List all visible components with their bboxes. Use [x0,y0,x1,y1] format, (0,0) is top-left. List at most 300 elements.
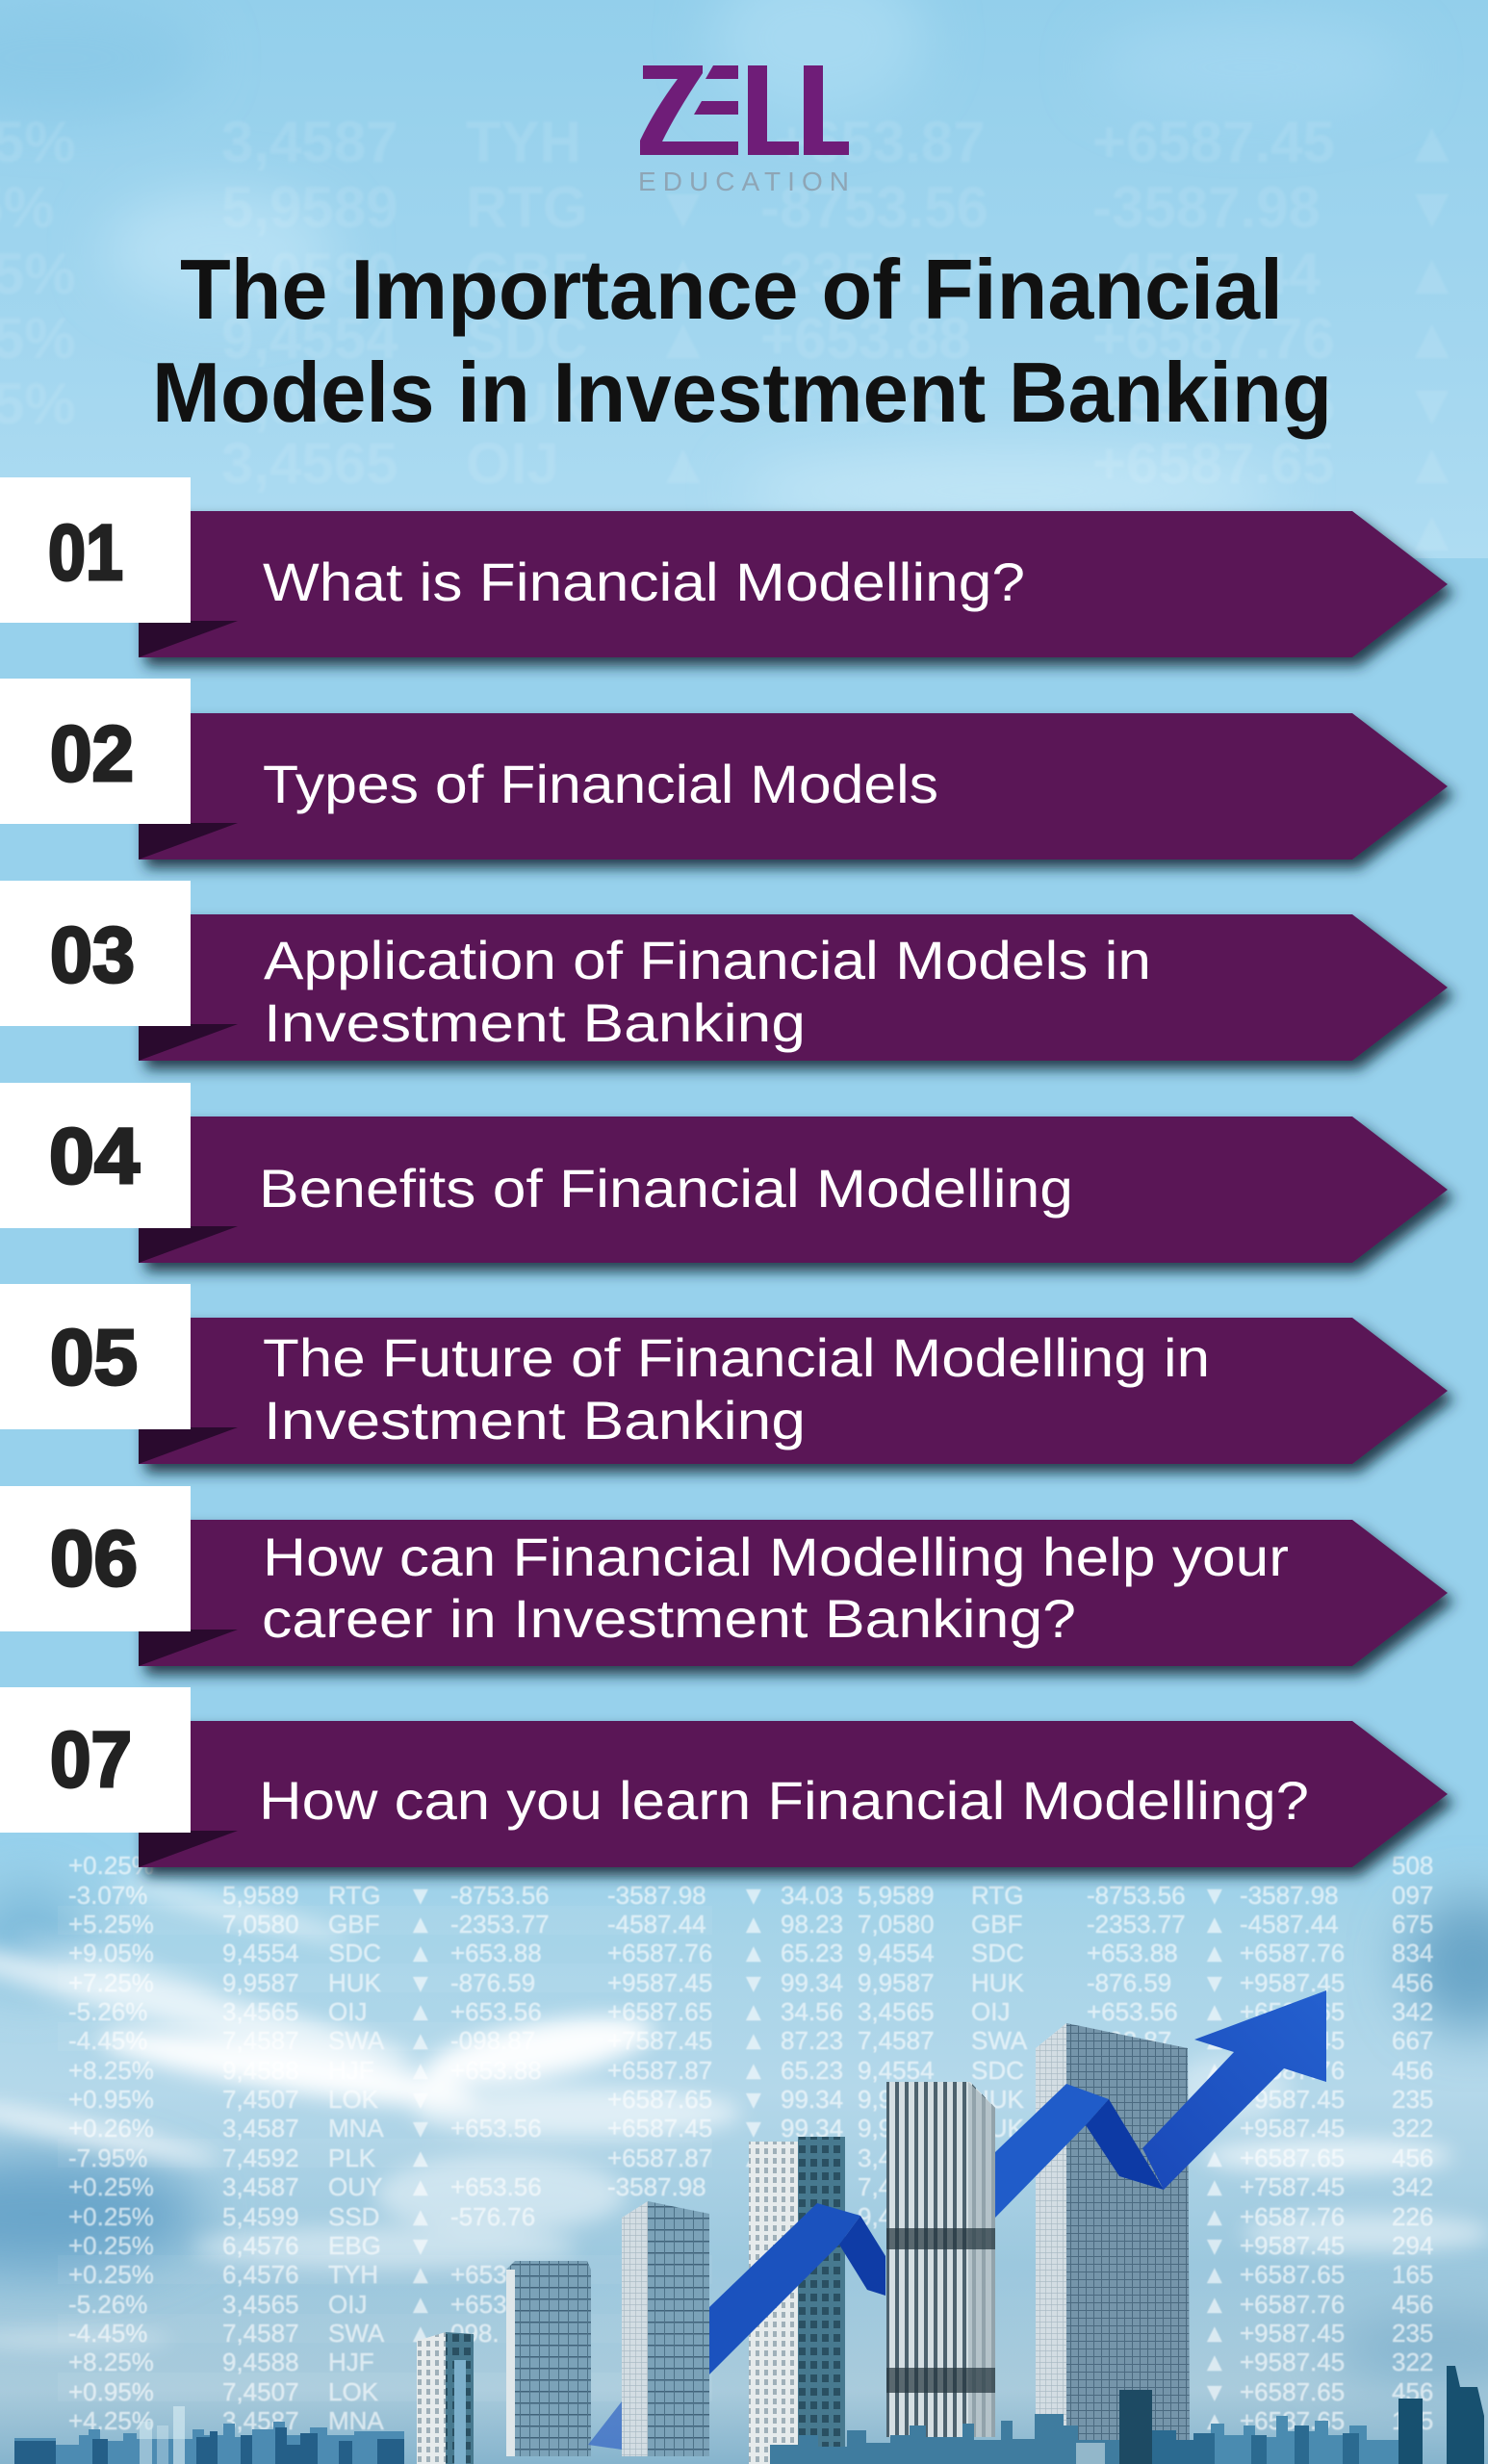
background: upper sky [0,0,1488,1858]
ticker data board: 7,0580 [222,1910,299,1938]
ticker data board: -7.95% [68,2143,147,2172]
ribbon fold [139,621,238,657]
ticker data board: ▲ [741,1938,766,1967]
ghost ticker behind title: GBF [466,242,588,306]
ribbon fold [139,1226,238,1263]
ghost ticker behind title: 5,9589 [221,175,398,240]
ticker data board: 456 [1392,2290,1433,2319]
ticker data board: HJF [328,2348,374,2376]
ticker data board: +6587.65 [1240,2406,1345,2435]
ticker data board: ▲ [1202,2056,1227,2085]
ticker data board: ▲ [408,2026,433,2055]
ticker data board: LOK [328,2377,379,2406]
item 05 [0,1284,1448,1464]
ticker data board: 294 [1392,2231,1433,2260]
ticker data board: +6587.45 [607,2114,712,2143]
ticker data board: ▲ [1202,2260,1227,2289]
ghost ticker behind title: +6587.76 [1092,306,1335,371]
ticker data board: 5,9589 [858,1881,935,1910]
ghost ticker behind title: +9587.45 [1092,372,1335,436]
ghost ticker behind title: ▲ [654,431,711,496]
ticker data board: ▼ [1202,2231,1227,2260]
ticker data board: -3587.98 [1240,1881,1339,1910]
ticker data board: +8.25% [68,2056,154,2085]
ticker data board: +6587.76 [1240,2290,1345,2319]
ticker data board: +0.26% [68,2114,154,2143]
ticker data board: +0.95% [68,2085,154,2114]
ticker data board: MNA [328,2406,384,2435]
ghost ticker behind title: ▼ [654,372,711,436]
label [264,930,1151,1053]
ticker data board: 7,4587 [222,2026,299,2055]
ghost ticker behind title: 9,4554 [221,306,398,371]
ticker data board: 99.34 [781,1968,843,1997]
ticker data board: +5.25% [68,1910,154,1938]
ticker data board: 9,9587 [222,1968,299,1997]
ticker data board: 097 [1392,1881,1433,1910]
ticker data board: +0.25% [68,2202,154,2231]
ticker data board: OIJ [328,2290,367,2319]
ticker data board: 7,4592 [222,2143,299,2172]
ticker data board: 098. [450,2319,500,2348]
title [152,242,1332,440]
ticker data board: ▼ [1202,2085,1227,2114]
ticker data board: 9,4554 [222,1938,299,1967]
building 5 [886,2082,995,2437]
ticker data board: 322 [1392,2114,1433,2143]
ticker data board: +653.56 [450,1997,542,2026]
ticker data board: +6587.76 [1240,2202,1345,2231]
ticker data board: 9,4554 [858,1938,935,1967]
ticker data board: ▼ [1202,1968,1227,1997]
label: What is Financial Modelling? [263,552,1025,612]
logo mark [640,65,849,155]
ghost ticker behind title: -876.59 [760,372,957,436]
ticker data board: EBG [328,2231,381,2260]
ticker data board: +0.25% [68,2231,154,2260]
ticker data board: ▲ [741,1910,766,1938]
ticker data board: +9587.45 [1240,2114,1345,2143]
ticker data board: +6587.87 [607,2056,712,2085]
ticker data board [68,1851,1433,2435]
ticker data board: 235 [1392,2085,1433,2114]
ticker data board: +9587.45 [607,1968,712,1997]
ticker data board: OIJ [328,1997,367,2026]
ticker data board: ▲ [1202,2202,1227,2231]
number: 07 [50,1716,132,1804]
ticker data board: ▼ [1202,2114,1227,2143]
ticker data board: ▲ [1202,2319,1227,2348]
ticker data board: +9587.45 [1240,1968,1345,1997]
ghost ticker behind title: ▲ [1403,431,1460,496]
ticker data board: 7,4587 [222,2319,299,2348]
item 02 [0,679,1448,860]
ticker data board: ▲ [408,2202,433,2231]
number box [0,1083,191,1228]
ticker data board: -4.45% [68,2026,147,2055]
ticker data board: 9,4588 [222,2348,299,2376]
ticker data board: +653.88 [450,1938,542,1967]
ghost ticker behind title: -4587.44 [1092,242,1321,306]
ticker data board: +6587.76 [1240,2056,1345,2085]
ticker data board: +0.25% [68,2172,154,2201]
ticker data board: 7,4507 [222,2377,299,2406]
ticker data board: +653.56 [1087,1997,1178,2026]
ticker data board: +653.88 [1087,1938,1178,1967]
ticker data board: +7587.45 [607,2026,712,2055]
ticker data board: 99.34 [781,2085,843,2114]
ticker data board: 675 [1392,1910,1433,1938]
label: Application of Financial Models in [264,930,1151,990]
ticker data board: 7,4587 [858,2026,935,2055]
number box [0,1687,191,1833]
building 6 [1036,2023,1190,2440]
ghost ticker behind title: ▲ [1403,242,1460,306]
number: 04 [49,1113,140,1200]
city buildings [417,1990,1326,2464]
ticker data board: ▼ [408,2085,433,2114]
ticker data board: -098.87 [450,2026,535,2055]
label: career in Investment Banking? [262,1588,1076,1649]
ticker data board: ▲ [408,2260,433,2289]
ticker data board: PLK [328,2143,376,2172]
ribbon fold [139,1630,238,1666]
ticker data board: 87.23 [781,2026,843,2055]
ticker data board: +9587.45 [1240,2348,1345,2376]
ticker data board: 226 [1392,2202,1433,2231]
ticker data board: -2353.77 [1087,1910,1186,1938]
ticker data board: SSD [328,2202,379,2231]
ticker data board: 3,4587 [222,2406,299,2435]
ticker data board: +6587.65 [1240,2377,1345,2406]
ghost ticker behind title: ▼ [654,175,711,240]
ticker data board: 7,4587 [858,2172,935,2201]
ticker data board: +9587.45 [1240,2231,1345,2260]
ticker data board: -876.59 [1087,1968,1171,1997]
number: 06 [50,1515,138,1603]
ticker data board: ▼ [408,2231,433,2260]
label: Investment Banking [264,1390,806,1450]
city skyline, far layer [14,2406,1398,2464]
ticker data board: ▲ [741,2026,766,2055]
number: 05 [50,1314,138,1401]
ticker data board: +6587.65 [607,2085,712,2114]
ticker data board: 667 [1392,2026,1433,2055]
number: 02 [50,710,134,798]
ghost ticker behind title: OIJ [466,431,559,496]
arrow tail light segment [588,2401,622,2450]
ticker data board: ▼ [741,1968,766,1997]
ticker data board: ▲ [1202,1997,1227,2026]
label [263,1327,1210,1450]
ticker data board: +6587.76 [607,1938,712,1967]
ticker data board: ▲ [408,2172,433,2201]
item 07 [0,1687,1448,1867]
ghost ticker behind title: ▲ [654,242,711,306]
ticker data board: 165 [1392,2406,1433,2435]
ticker data board: 7,4507 [222,2085,299,2114]
ticker data board: ▲ [408,2143,433,2172]
item 01 [0,477,1448,657]
ticker data board: ▼ [1202,2377,1227,2406]
ticker data board: 3,4565 [858,2143,935,2172]
ticker data board: SWA [328,2319,385,2348]
ticker data board: 3,4587 [222,2114,299,2143]
ticker data board: ▼ [741,1881,766,1910]
ticker data board: -4.45% [68,2319,147,2348]
ticker data board: GBF [328,1910,379,1938]
ticker data board: 3,4565 [222,2290,299,2319]
ghost ticker behind title: 3,4565 [221,431,398,496]
ticker data board: ▲ [408,2290,433,2319]
ticker data board: -876.59 [450,1968,535,1997]
ticker data board: ▲ [408,1910,433,1938]
ticker data board: -4587.44 [607,1910,706,1938]
ticker data board: +9587.45 [1240,2085,1345,2114]
ticker data board: SDC [971,1938,1024,1967]
ticker data board: +7587.45 [1240,2026,1345,2055]
ticker data board: ▲ [1202,2348,1227,2376]
title: Models in Investment Banking [152,345,1332,440]
number box [0,477,191,623]
ribbon [139,914,1448,1061]
ticker data board: -5.26% [68,2290,147,2319]
ghost ticker behind title: HUK [466,372,591,436]
ticker data board: +4.25% [68,2406,154,2435]
label: Benefits of Financial Modelling [259,1158,1073,1219]
ghost ticker behind title: ▼ [1403,175,1460,240]
ribbon [139,1318,1448,1464]
ghost ticker behind title: +6587.65 [1092,431,1335,496]
ticker data board: ▼ [408,1968,433,1997]
ticker data board: ▲ [741,1997,766,2026]
ticker data board: 3,4565 [222,1997,299,2026]
ribbon fold [139,1831,238,1867]
ticker data board: 3,4565 [858,1997,935,2026]
ticker data board: TYH [328,2260,378,2289]
ticker data board: 9,4554 [858,2202,935,2231]
ticker data board: 322 [1392,2348,1433,2376]
ticker data board: ▲ [1202,2143,1227,2172]
ticker data board: ▼ [1202,1881,1227,1910]
ribbon [139,511,1448,657]
ticker data board: LOK [328,2085,379,2114]
title: The Importance of Financial [180,242,1283,337]
ticker data board: SWA [971,2026,1028,2055]
ticker data board: 65.23 [781,2056,843,2085]
ticker data board: HUK [328,1968,382,1997]
ribbon [139,1116,1448,1263]
ticker data board: +7.25% [68,1968,154,1997]
ghost ticker behind title: +6587.45 [1092,110,1335,174]
arrow segment 1 [709,2203,885,2374]
ticker data board: 342 [1392,2172,1433,2201]
ticker data board: ▲ [408,1997,433,2026]
clouds [0,1871,1488,2348]
ticker data board: ▲ [1202,2172,1227,2201]
ticker data board: ▲ [1202,2290,1227,2319]
ghost ticker behind title: ▲ [1403,110,1460,174]
ticker data board: OUY [328,2172,382,2201]
ticker data board: 65.23 [781,1938,843,1967]
ticker data board: 834 [1392,1938,1433,1967]
ticker data board: +6587.65 [1240,2143,1345,2172]
ticker data board: 508 [1392,1851,1433,1880]
ticker data board: OIJ [971,1997,1010,2026]
ticker data board: +0.25% [68,2260,154,2289]
number: 03 [50,911,135,999]
ghost ticker behind title: +653.88 [760,306,971,371]
label: Types of Financial Models [263,754,938,814]
label: The Future of Financial Modelling in [263,1327,1210,1388]
ticker data board: 5,4599 [222,2202,299,2231]
ticker data board: ▲ [408,2056,433,2085]
building 1 [417,2332,474,2464]
ticker data board: ▼ [408,2114,433,2143]
logo wordmark: EDUCATION [638,167,849,196]
ticker data board: 9,9587 [858,2114,935,2143]
number box [0,1284,191,1429]
ribbon fold [139,1427,238,1464]
ticker data board: ▲ [1202,2026,1227,2055]
ticker data board: 6,4576 [222,2231,299,2260]
ticker data board: 3,4587 [222,2172,299,2201]
number box [0,679,191,824]
ghost ticker behind title [0,110,1460,563]
number box [0,1486,191,1631]
ticker data board: -8753.56 [450,1881,550,1910]
ticker data board: 7,0580 [858,1910,935,1938]
ticker data board: 456 [1392,2143,1433,2172]
ticker data board: +0.95% [68,2377,154,2406]
ticker data board: 235 [1392,2319,1433,2348]
ticker data board: 34.56 [781,1997,843,2026]
ghost ticker behind title: 9,9587 [221,372,398,436]
ticker data board: 9,9587 [858,1968,935,1997]
ticker data board: GBF [971,1910,1022,1938]
ticker data board: 456 [1392,1968,1433,1997]
ticker data board: ▲ [1202,1910,1227,1938]
ticker data board: 165 [1392,2260,1433,2289]
ticker data board: +9587.45 [1240,2319,1345,2348]
ticker data board: 9,9587 [858,2085,935,2114]
ticker data board: ▲ [741,2056,766,2085]
ticker data board: -5.26% [68,1997,147,2026]
item 04 [0,1083,1448,1263]
ticker data board: +6587.65 [607,1997,712,2026]
ghost ticker behind title: +653.87 [775,110,986,174]
ticker data board: +653.56 [450,2172,542,2201]
ticker data board: -098.87 [1087,2026,1171,2055]
ribbon [139,1721,1448,1867]
ticker data board: RTG [328,1881,380,1910]
ribbon [139,1520,1448,1666]
ticker data board: ▼ [741,2114,766,2143]
ghost ticker behind title: TYH [466,110,581,174]
ticker data board: ▼ [741,2085,766,2114]
ticker data board: +0.25% [68,1851,154,1880]
ticker data board: MNA [328,2114,384,2143]
number box [0,881,191,1026]
ribbon fold [139,1024,238,1061]
ticker data board: 456 [1392,2377,1433,2406]
ticker data board: -8753.56 [1087,1881,1186,1910]
ribbon fold [139,823,238,860]
ticker data board: HUK [971,2085,1025,2114]
ticker data board: SDC [328,1938,381,1967]
ticker data board: SWA [328,2026,385,2055]
ghost ticker behind title: -8753.56 [760,175,988,240]
number: 01 [48,509,123,597]
blue growth arrow [995,1990,1326,2218]
building 3 [622,2201,709,2456]
label: How can Financial Modelling help your [263,1527,1289,1587]
background: lower sky [0,1843,1488,2464]
ticker data board: +7587.45 [1240,2172,1345,2201]
ticker data board: +653 [450,2290,507,2319]
city skyline, near layer [14,2366,1484,2464]
ghost ticker behind title: 7,0580 [221,242,398,306]
ticker data board: -3.07% [68,1881,147,1910]
ticker data board: -2353.77 [450,1910,550,1938]
label [262,1527,1289,1649]
ticker data board: 99.34 [781,2114,843,2143]
ghost ticker behind title: -3587.98 [1092,175,1321,240]
ghost ticker behind title: ▲ [1403,499,1460,563]
ticker data board: -3587.98 [607,1881,706,1910]
ticker data board: +6587.65 [1240,1997,1345,2026]
ticker data board: SDC [971,2056,1024,2085]
item 06 [0,1486,1448,1666]
ticker data board: 342 [1392,1997,1433,2026]
ticker data board: +6587.87 [607,2143,712,2172]
ticker data board: 6,4576 [222,2260,299,2289]
ticker data board: ▲ [1202,1938,1227,1967]
ticker data board: ▼ [408,1881,433,1910]
ticker data board: 5,9589 [222,1881,299,1910]
ticker data board: HJF [328,2056,374,2085]
ticker data board: 34.03 [781,1881,843,1910]
ticker data board: HUK [971,1968,1025,1997]
ribbon [139,713,1448,860]
ticker data board: -576.76 [450,2202,535,2231]
logo: Zell Education [638,65,849,196]
ghost ticker behind title: 3,4587 [221,110,398,174]
ghost ticker behind title: SDC [466,306,588,371]
item 03 [0,881,1448,1061]
ticker data board: ▲ [408,2319,433,2348]
building 2 [506,2261,591,2456]
ticker data board: 456 [1392,2056,1433,2085]
ticker data board: +653.56 [450,2114,542,2143]
label: How can you learn Financial Modelling? [259,1770,1309,1831]
ghost ticker behind title: ▼ [1403,372,1460,436]
ticker data board: +6587.65 [1240,2260,1345,2289]
building 4 [749,2137,845,2464]
ticker data board: +9.05% [68,1938,154,1967]
ghost ticker behind title: ▲ [1403,306,1460,371]
ticker data board: +653.88 [450,2056,542,2085]
ticker data board: RTG [971,1881,1023,1910]
ghost ticker behind title: -2353.77 [760,242,988,306]
ticker data board: 98.23 [781,1910,843,1938]
ticker data board: +653 [450,2260,507,2289]
ticker data board: 9,4554 [858,2056,935,2085]
ticker data board: ▲ [741,2143,766,2172]
ghost ticker behind title: ▲ [654,306,711,371]
ticker data board: HUK [971,2114,1025,2143]
ticker data board: +6587.76 [1240,1938,1345,1967]
